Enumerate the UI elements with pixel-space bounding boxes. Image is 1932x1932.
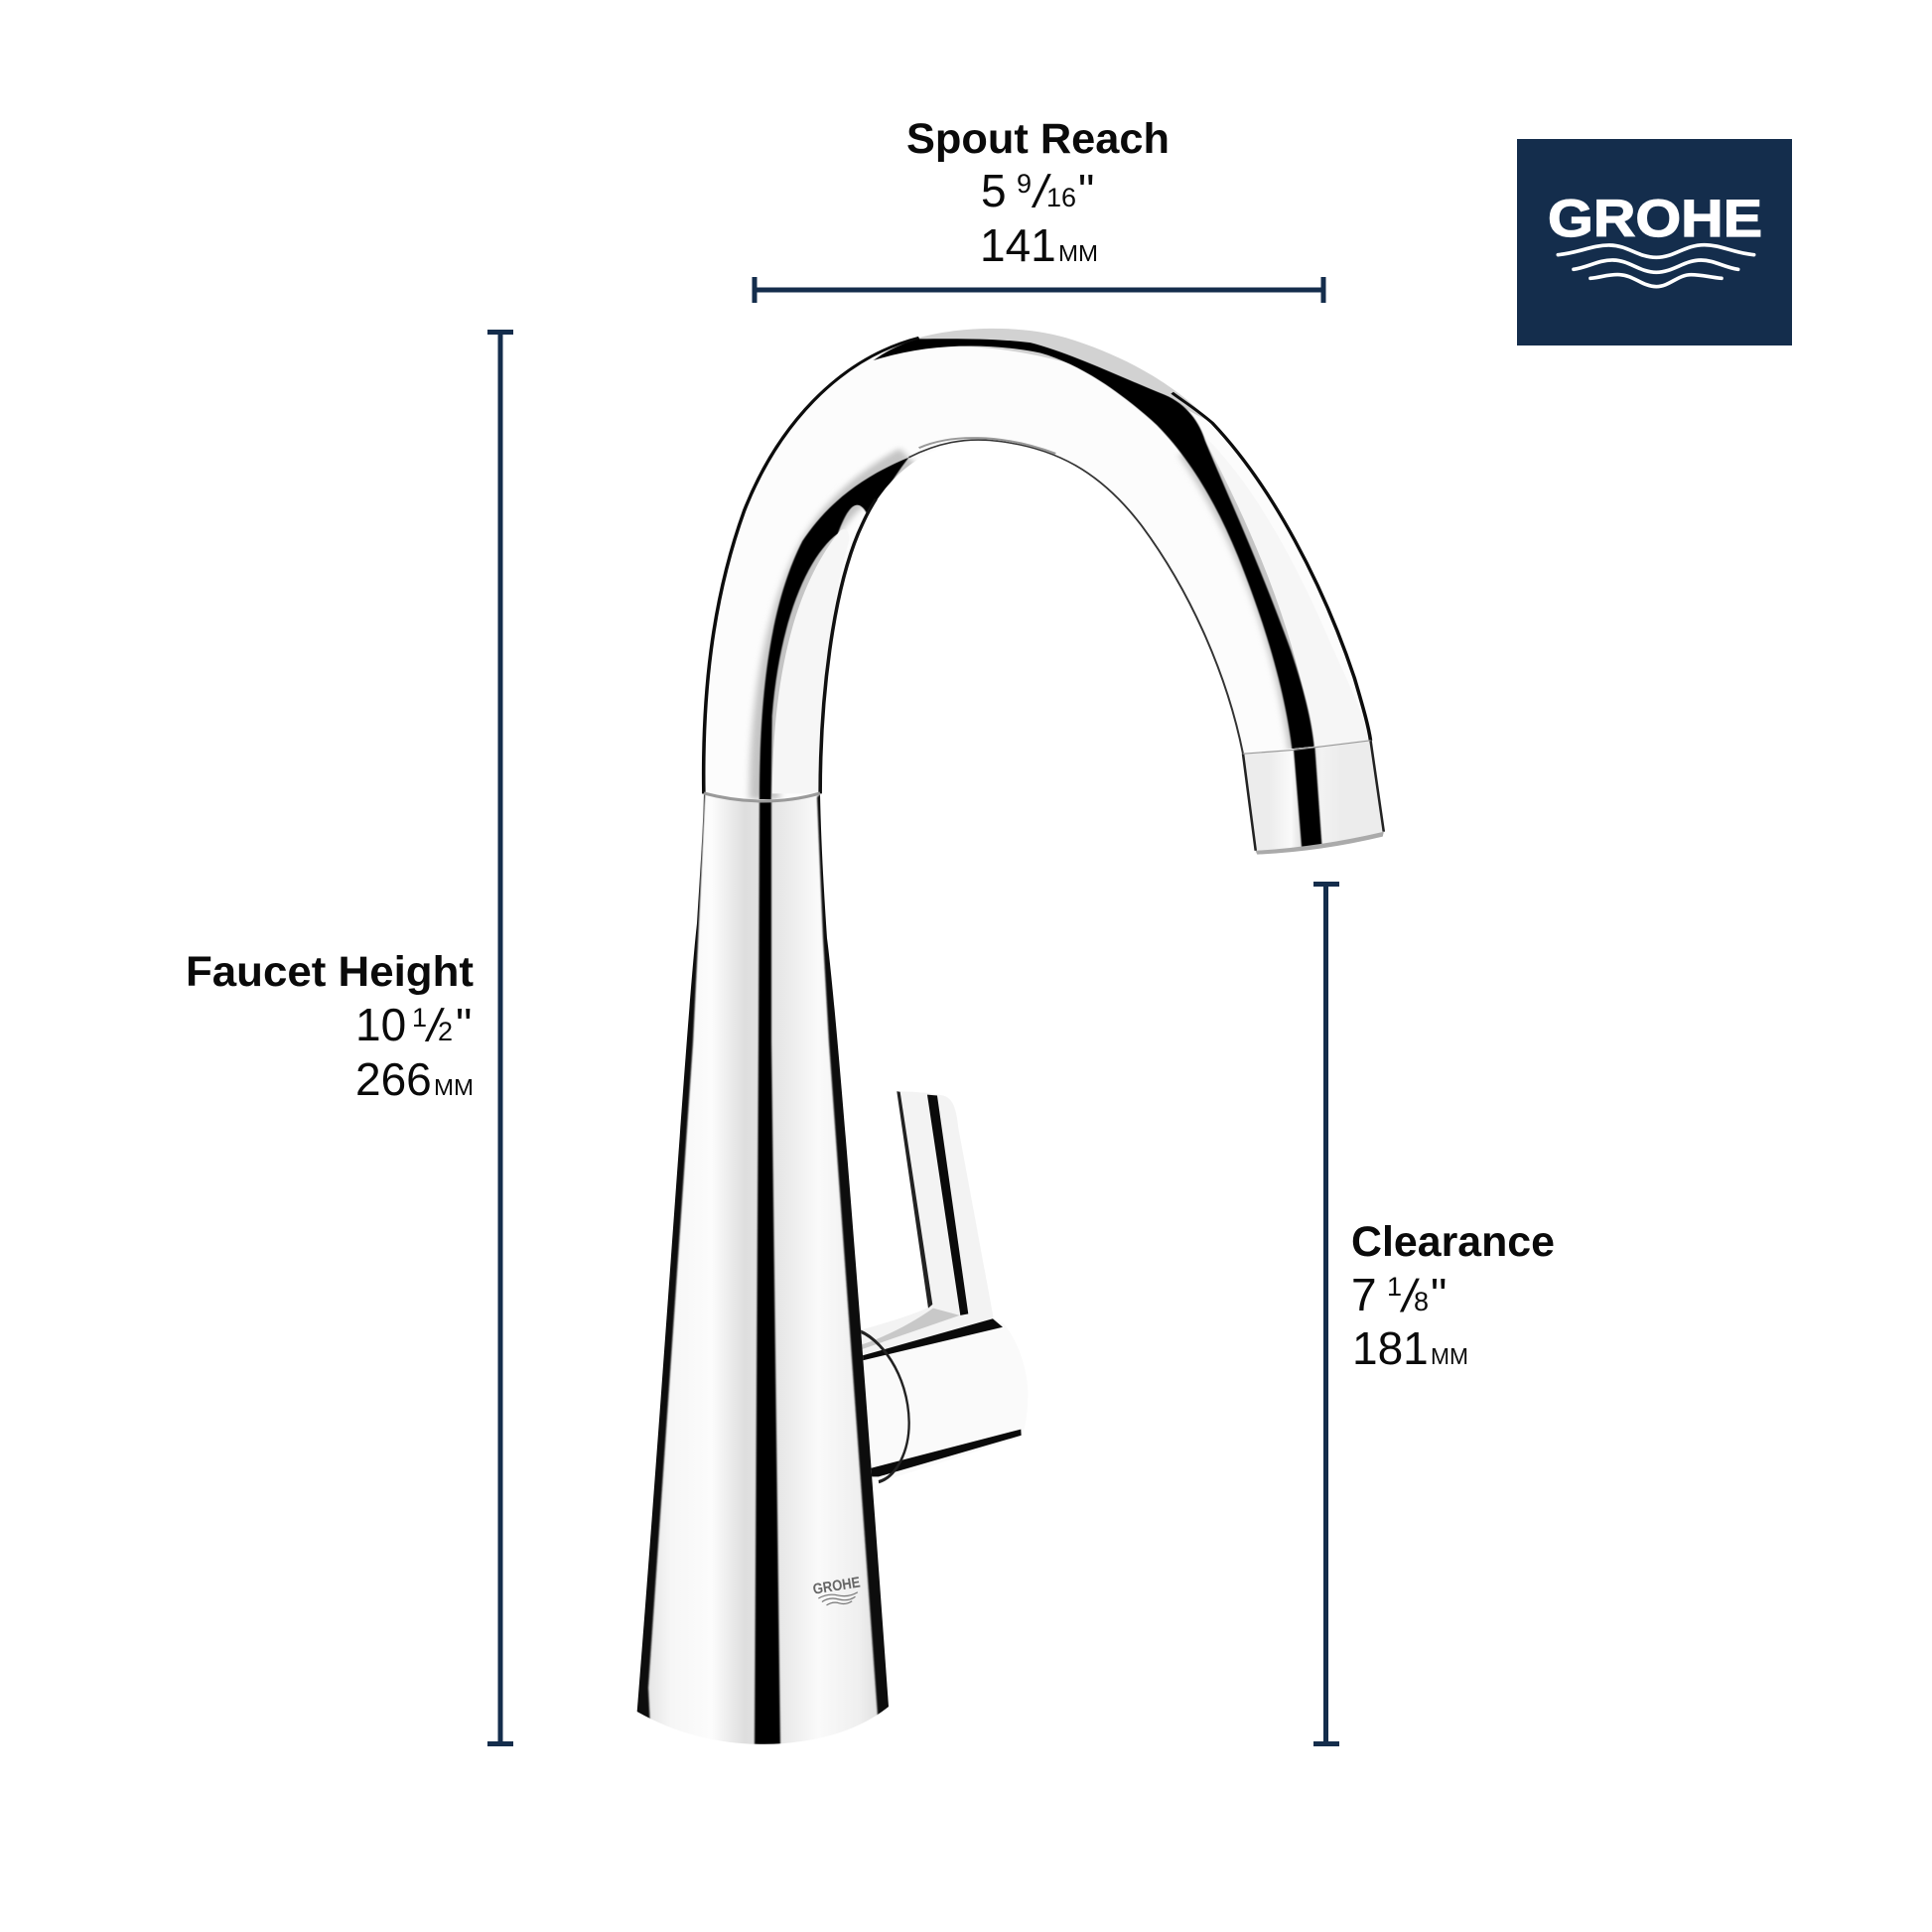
arrow: faucet height dimension line xyxy=(487,330,513,1746)
spout: nozzle tip xyxy=(1243,741,1384,855)
value: clearance millimetres: MM xyxy=(1431,1343,1468,1369)
value: clearance inches: 8 xyxy=(1414,1287,1429,1316)
arrow: clearance dimension line xyxy=(1313,882,1339,1746)
value: spout reach inches: 16 xyxy=(1046,183,1076,212)
value: faucet height inches: / xyxy=(423,1000,447,1050)
heading: clearance: Clearance xyxy=(1351,1218,1555,1266)
value: spout reach inches xyxy=(981,165,1094,216)
value: spout reach inches: / xyxy=(1030,166,1053,216)
dimension: spout reach xyxy=(753,115,1326,303)
value: clearance inches: " xyxy=(1431,1269,1447,1320)
logo: small GROHE engraving xyxy=(812,1574,863,1608)
value: faucet height inches: 2 xyxy=(438,1017,453,1046)
handle: lever and cylinder xyxy=(854,1091,1028,1482)
value: faucet height inches: 10 xyxy=(355,999,406,1050)
value: spout reach millimetres xyxy=(980,219,1098,271)
value: clearance inches: 7 xyxy=(1351,1269,1377,1320)
value: faucet height inches: 1 xyxy=(412,1003,427,1033)
value: clearance millimetres: 181 xyxy=(1352,1322,1429,1374)
value: spout reach inches: " xyxy=(1078,165,1094,216)
dimension: clearance xyxy=(1313,882,1555,1746)
illustration: chrome faucet xyxy=(625,326,1384,1744)
value: clearance inches: / xyxy=(1398,1270,1422,1321)
heading: faucet height: Faucet Height xyxy=(186,948,474,996)
value: faucet height millimetres: 266 xyxy=(355,1053,432,1105)
value: spout reach millimetres: 141 xyxy=(980,219,1056,271)
value: faucet height millimetres xyxy=(355,1053,474,1105)
logo: GROHE badge xyxy=(1517,139,1792,345)
value: spout reach millimetres: MM xyxy=(1058,240,1098,266)
spout: curved pipe xyxy=(704,326,1371,799)
value: spout reach inches: 9 xyxy=(1017,169,1032,199)
dimension: faucet height xyxy=(186,330,513,1746)
value: spout reach inches: 5 xyxy=(981,165,1007,216)
body: tapered column xyxy=(625,784,898,1744)
value: faucet height millimetres: MM xyxy=(434,1074,474,1100)
value: clearance inches: 1 xyxy=(1387,1272,1402,1302)
logo: small GROHE engraving: GROHE xyxy=(812,1574,862,1598)
value: clearance millimetres xyxy=(1352,1322,1468,1374)
value: faucet height inches: " xyxy=(456,999,472,1050)
value: faucet height inches xyxy=(355,999,472,1050)
logo: GROHE badge: GROHE xyxy=(1548,190,1762,248)
arrow: spout reach dimension line xyxy=(753,277,1326,303)
value: clearance inches xyxy=(1351,1269,1447,1321)
heading: spout reach: Spout Reach xyxy=(906,115,1170,163)
